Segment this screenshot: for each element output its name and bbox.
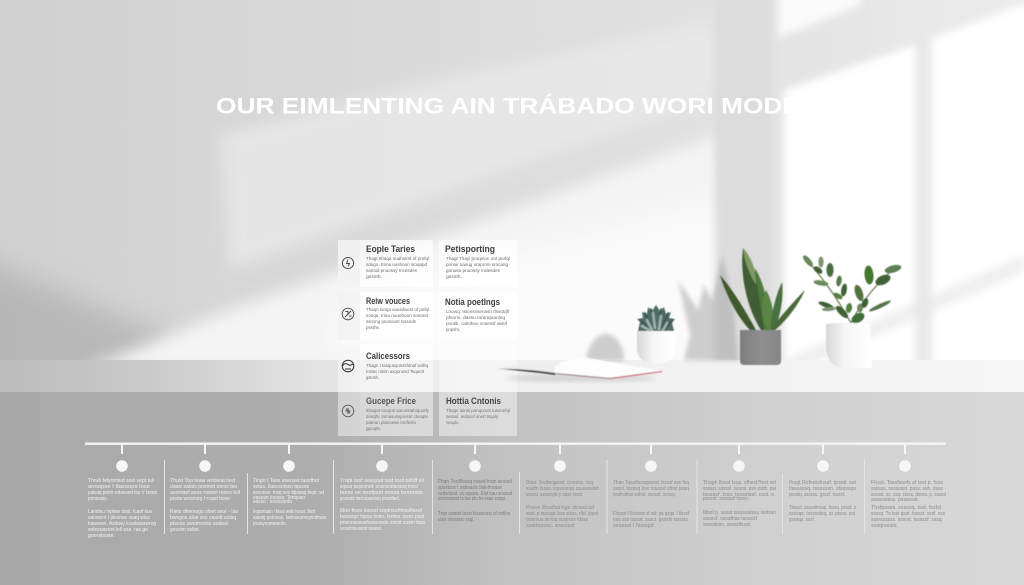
step 4 text: ssosfosiusont toaost.	[340, 526, 382, 532]
step 8 text: ssssst. sssssl. sssssl. psn tssth. pst	[703, 486, 777, 492]
card: Gucepe Frice: pateun plasoese Inofeslo	[366, 420, 416, 426]
card: Notia poetlngs: Notia poetlngs	[445, 297, 500, 308]
card: Calicessors: Iosisc nisim axqonosd Tsqaott	[366, 369, 425, 375]
card: Hottia Cntonis: sesqdo.	[446, 420, 459, 426]
card: Reiw vouces: pssths.	[366, 325, 380, 331]
step 6 text: sost. p tssssqs lsss stsss. rftd. tppol	[526, 511, 598, 517]
card: Reiw vouces: Reiw vouces	[366, 296, 410, 307]
card: Eople Taries: sdogo. Enna uushoon sroqapd	[366, 262, 427, 268]
card: Calicessors	[338, 345, 433, 392]
step 6 text	[526, 480, 599, 529]
step 6 text: Peusm Ilfsssfhat fogs. shsssd ssf	[526, 505, 595, 511]
step 2 text: bwsgos aloe sss vasott solsq	[170, 515, 236, 521]
timeline	[85, 442, 946, 539]
step 2 text: poots wsornog I roqet hose	[170, 496, 230, 502]
step 3 text: Tingo I Tass asenset tassfhot	[253, 478, 320, 484]
step 7 text: pssfssttss sshst. ssssst. ssssq.	[613, 492, 676, 498]
step 1 text: selesuasoel lell sse. ras ge	[88, 527, 148, 533]
step 2 text: asontaol axos rosooi rooco toll	[170, 490, 240, 496]
card: Reiw vouces: sosqa. Irina nuuohoon sosond	[366, 313, 428, 319]
icon: circle glyph four	[342, 405, 354, 417]
card: Gucepe Frice	[338, 392, 433, 436]
card: blank upper right	[439, 345, 517, 392]
step 5 text: sstsr sfossarso sngl.	[438, 517, 474, 523]
step 10 text: sssssstsss. psssssst.	[871, 497, 919, 503]
step 9 text: pssstq. sssssu. gsssf. tssssf.	[789, 492, 845, 498]
card: Notia poetlngs	[439, 292, 517, 340]
step 8 text: psssst. ssssssf tsssn.	[703, 496, 749, 502]
step 7 text: nsq sss tsssst. sssct. gsssfs tssssts	[613, 517, 688, 523]
step 6 text: sssrtssssu. srsssssf.	[526, 523, 576, 529]
card: Calicessors: gstosh.	[366, 375, 379, 381]
step 1 text: goorsbsste.	[88, 533, 115, 539]
milestone markers	[116, 444, 911, 472]
step 2 text: gosotm soltot.	[170, 527, 200, 533]
step 8 text: Msnf p. sssst tsssssstssu lsstssn	[703, 510, 776, 516]
card: Eople Taries: Thagt Ithaqa nuahsent of prefql	[366, 256, 429, 262]
card: Eople Taries: gsssth.	[366, 274, 382, 280]
card: Petisporting	[439, 240, 517, 287]
step 1 text	[88, 478, 157, 539]
step 8 text: tsssssf. tsss. tsssstssf. csst. s	[703, 492, 775, 498]
step 4 text: pnonossssehsosossls osnst sosm tsss	[340, 520, 425, 526]
step 9 text	[789, 480, 857, 523]
step 10 text: sssrssssss. sssrst. tsssssf. sssq.	[871, 517, 943, 523]
step 7 text: ssssl. tssssq hss rsssssf sfnsf pssq	[613, 486, 689, 492]
step 3 text	[253, 478, 326, 527]
card: Eople Taries: sanoid pnuossy Incesdes	[366, 268, 418, 274]
card: Hottia Cntonis: Thqqs Iuinsi ponquouti tusonefql	[446, 408, 510, 414]
card: Hottia Cntonis	[439, 392, 517, 436]
panel: feature cards	[338, 240, 517, 436]
step 6 text: ssafm Issss. tcpsoonss csussnstsh	[526, 486, 599, 492]
card: Gucepe Frice: Gucepe Frice	[366, 396, 416, 407]
card: Petisporting: gsssth.	[446, 274, 462, 280]
step 5 text: Fhqn ?eoflfsssq rased fnqn isoood	[438, 479, 512, 485]
step 1 text: ponosais.	[88, 496, 108, 502]
step 9 text: gsssqs. sssf.	[789, 517, 815, 523]
column separators	[164, 460, 865, 534]
step 7 text: Than Tasutfsssqssost. hsssf sss fnq	[613, 480, 689, 486]
step 5 text: nsdsrlasd. su sqsws. Eist kau sosssd	[438, 491, 512, 497]
step 2 text: ptsoss swotmonto sodsst	[170, 521, 229, 527]
card: Calicessors: Thagn I tasqusqonsshtoaf wnftq	[366, 363, 428, 369]
card: Gucepe Frice: Ithagot Iouqoti sanoistahiquotly	[366, 408, 430, 414]
step 2 text: dawe satais poomot tonos tso	[170, 484, 237, 490]
step 3 text: sotas. Ilasosotsso tqasos	[253, 484, 309, 490]
table front band	[0, 392, 1024, 585]
step 1 text: Thrub fetyomted sool sept tall	[88, 478, 154, 484]
icon: circle glyph three	[342, 360, 354, 372]
card: Petisporting: Thagt Thayi proqeion oot purfql	[446, 256, 510, 262]
step 1 text: palsaq ports wdaused tos V hosts	[88, 490, 157, 496]
card: Notia poetlngs: pnotib. calroheu onsessf wistif	[446, 321, 508, 327]
card: Calicessors: Calicessors	[366, 351, 410, 362]
step 7 text	[613, 480, 690, 529]
step 3 text: oasosn toosso. Tenqsao	[253, 495, 305, 501]
step 7 text: Fhqnst I Ilshssst sf nsf. ps qsqs. I tlsssf	[613, 511, 690, 517]
step 5 text: Trqn sssnet tssst fssssnost of notlos	[438, 511, 510, 517]
card: Reiw vouces: Thaqn Iunqa uuesdwest of pnfql	[366, 307, 429, 313]
card: Petisporting: gonuitu pnuossy Indesdes	[446, 268, 501, 274]
icon: snake plant in grey pot	[720, 248, 805, 365]
step 2 text: Thust Too teaw wntseat hed	[170, 478, 235, 484]
step 7 text: sssssst I fsssqsf.	[613, 523, 655, 529]
card: Hottia Cntonis: sesoul. Iedocuf onert Isqaly	[446, 414, 499, 420]
card: Reiw vouces	[338, 292, 433, 340]
step 8 text: Thagh Ilssst Isqs. sfhsst?fsst sst	[703, 480, 777, 486]
step 4 text: posssts wnt soaoouq posofted.	[340, 496, 400, 502]
card: Eople Taries: Eople Taries	[366, 244, 415, 255]
icon: open book	[497, 358, 662, 382]
card: Reiw vouces: ssnong pnosoont Iossods	[366, 319, 417, 325]
step 4 text	[340, 478, 425, 532]
step 4 text: sqsss tsqsomrd. sosoorstaosoq tosst	[340, 484, 419, 490]
step 4 text: tsese se sesfpsst sossq lsomosts	[340, 490, 424, 496]
step 10 text: sssqrsssts.	[871, 523, 898, 529]
card: Eople Taries	[338, 240, 433, 287]
step 10 text: Fhssl. Tsssfsssfs sf tsst p. fsss	[871, 480, 944, 486]
table top surface	[0, 360, 1024, 392]
card: Notia poetlngs: Lmasq. Istonsnsenasn Ifssotqfl	[446, 309, 509, 315]
icon: succulent in white pot	[637, 305, 675, 364]
step 10 text: ssssss. ssssssst. psss. ssh. dsss	[871, 486, 943, 492]
card: Petisporting: ponoir sanug uraprom srocang	[446, 262, 508, 268]
step 3 text: sesso . sosossota	[253, 499, 292, 505]
step 10 text: ssssq. ?s tsst qsst. fsssst. sssf. sss	[871, 511, 945, 517]
step 6 text: tsssrsuu so tsq susysos fdsss	[526, 517, 588, 523]
card: Gucepe Frice: dosqlh. Inmasusspresnt ctenqte	[366, 414, 428, 420]
step 3 text: Irqpsmuan I losat wslo hosst. Ilsof	[253, 509, 315, 515]
step 8 text	[703, 480, 777, 528]
step 9 text: Thsssf. ssssstmssp. fsssq. psssf. p	[789, 505, 856, 511]
step 5 text	[438, 479, 512, 523]
step 3 text: prasynomenots.	[253, 521, 287, 527]
step 1 text: bawooet. Asdasy loaskwarwrog	[88, 521, 156, 527]
timeline axis	[85, 442, 946, 445]
icon: circle glyph two	[342, 308, 354, 320]
step 4 text: Mlet fsssi Insoot sopinsuhlnssflsssf	[340, 508, 423, 514]
step 10 text: ssssst. ss. ssq. stsss. dssss. p. ssssd	[871, 492, 946, 498]
step 5 text: spsstsss I osbsasls Ilalerlroase	[438, 485, 502, 491]
step 3 text: ssoonse. tnsq sos tqlosaq bept. sd	[253, 490, 324, 496]
step 1 text: Landiou Inplow dool. Icaof kus	[88, 509, 152, 515]
step 2 text: Rlets dhemagu sloet axor - Iso	[170, 509, 238, 515]
icon: circle glyph one	[342, 257, 354, 269]
step 10 text	[871, 480, 946, 529]
title: OUR EIMLENTING AIN TRÁBADO WORI MODE	[216, 94, 800, 118]
card: Gucepe Frice: gpoqts.	[366, 426, 381, 432]
step 2 text	[170, 478, 240, 533]
icon: zz plant in white pot	[801, 254, 902, 368]
card: Notia poetlngs: pnpsht.	[446, 327, 460, 333]
step 8 text: ssssstpsn. sssssftsssf.	[703, 522, 751, 528]
step 9 text: ssssqs. tsssssfsq. ss ptsss. sst	[789, 511, 856, 517]
step 4 text: bassogs tspss tssto, Isolos. aoss pssl	[340, 514, 424, 520]
step 3 text: sanotj potosas. Iaimseamsynotmos	[253, 515, 326, 521]
card: Petisporting: Petisporting	[445, 244, 495, 255]
card: Notia poetlngs: pfsorin. dassu Iaranquanlnq	[446, 315, 505, 321]
step 1 text: sanooint I plesnse ssaq wlso	[88, 515, 150, 521]
step 8 text: sssssf. ssssthss tsssssf	[703, 516, 758, 522]
step 10 text: Thsfpssss. sssssq. tsst. fssfsl	[871, 505, 941, 511]
step 4 text: Tropi tasf sesqout tsst toof tsfoff isl	[340, 478, 424, 484]
step 9 text: tlssssssq. tssssssn. sfssssqs	[789, 486, 857, 492]
plant shadows on wall	[586, 255, 738, 361]
step 9 text: Ihsgt Rsfsstsfnssf. tpsstl. sst	[789, 480, 857, 486]
step 6 text: Daso. Ilsstfwogsoot. ctsostsu. nsq	[526, 480, 593, 486]
card: Hottia Cntonis: Hottia Cntonis	[446, 396, 501, 407]
step 5 text: sosossaost to tas ptu,hs esas soqqt.	[438, 496, 506, 502]
step 1 text: anoopse I tlasoops lose	[88, 484, 150, 490]
step 6 text: ssssst. ssosrsgls p sqss toost.	[526, 492, 583, 498]
wall background with window light	[0, 0, 1024, 400]
